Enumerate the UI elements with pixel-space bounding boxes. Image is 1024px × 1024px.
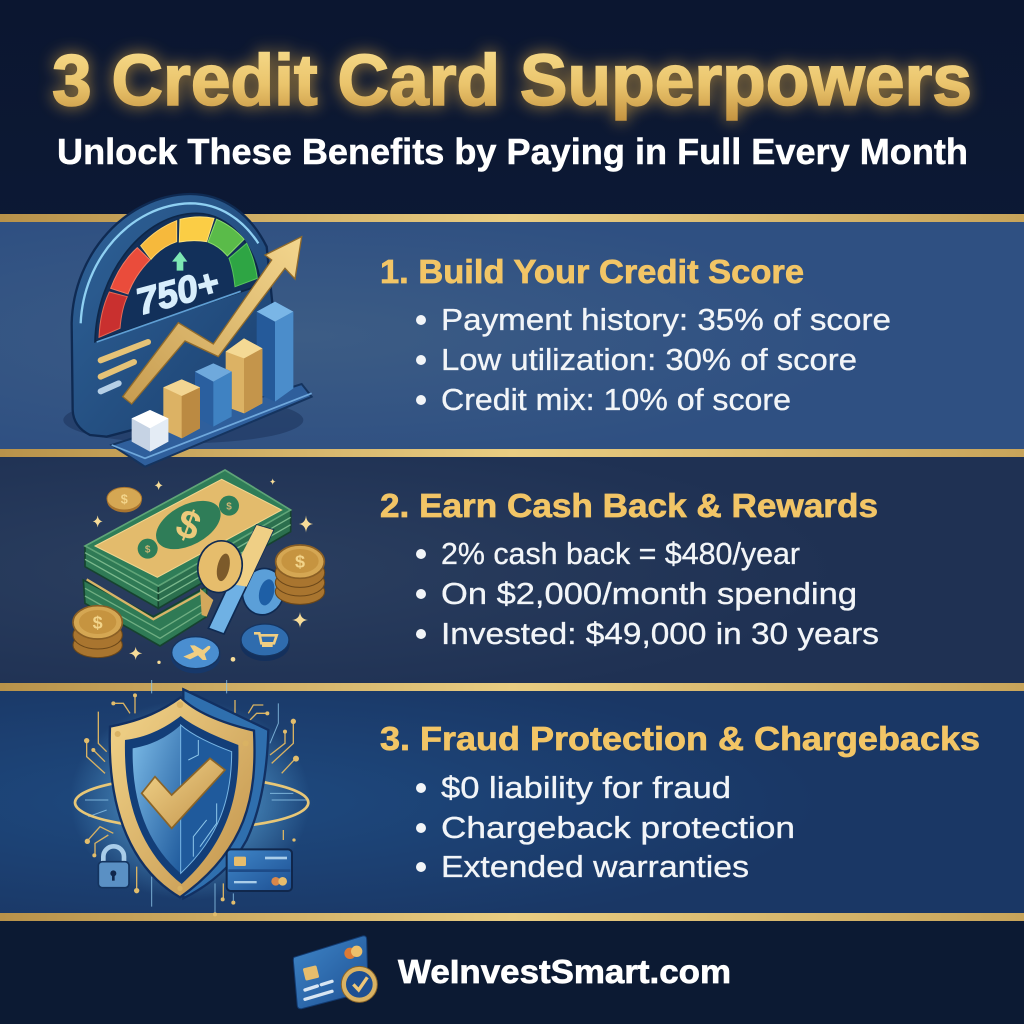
- band: cash back: [0, 454, 1024, 686]
- bullet list: fraud protection facts: [416, 770, 795, 884]
- title: 3 Credit Card Superpowers: [52, 41, 972, 121]
- icon: cash stacks, coins and percent sign: $: [170, 501, 206, 550]
- bullet list: credit score facts: Payment history: 35% of score: [441, 302, 891, 337]
- icon: cash stacks, coins and percent sign: [73, 470, 325, 673]
- icon: cash stacks, coins and percent sign: $: [121, 492, 128, 506]
- bullet list: credit score facts: Credit mix: 10% of score: [441, 382, 791, 417]
- bullet list: cash back facts: Invested: $49,000 in 30 years: [441, 616, 879, 651]
- bullet list: fraud protection facts: Extended warranties: [441, 849, 749, 884]
- icon: cash stacks, coins and percent sign: $: [295, 551, 305, 571]
- icon: cash stacks, coins and percent sign: $: [93, 613, 103, 633]
- bullet list: credit score facts: [416, 302, 891, 417]
- band: credit score: [0, 220, 1024, 452]
- bullet list: cash back facts: On $2,000/month spending: [441, 576, 857, 611]
- subtitle: Unlock These Benefits by Paying in Full Every Month: [57, 131, 968, 172]
- bullet list: cash back facts: [416, 536, 879, 651]
- heading: fraud protection: 3. Fraud Protection & Chargebacks: [380, 720, 980, 757]
- icon: shield with check mark, lock and card: [70, 680, 310, 916]
- icon: credit score gauge with rising chart: 750+: [132, 261, 223, 323]
- bullet list: fraud protection facts: $0 liability for fraud: [441, 770, 731, 805]
- heading: build credit score: 1. Build Your Credit Score: [380, 253, 804, 290]
- title: 3 Credit Card Superpowers: [52, 41, 972, 121]
- bullet list: fraud protection facts: Chargeback protection: [441, 810, 795, 845]
- band: fraud protection: [0, 688, 1024, 916]
- footer background: [0, 921, 1024, 1024]
- footer website name: WeInvestSmart.com: [398, 953, 731, 990]
- icon: credit score gauge with rising chart: [63, 194, 312, 467]
- icon: cash stacks, coins and percent sign: $: [226, 501, 232, 512]
- bullet list: credit score facts: Low utilization: 30% of score: [441, 342, 857, 377]
- icon: footer credit card badge: [293, 936, 377, 1009]
- icon: cash stacks, coins and percent sign: $: [145, 544, 151, 555]
- bullet list: cash back facts: 2% cash back = $480/year: [441, 536, 800, 571]
- heading: earn cash back: 2. Earn Cash Back & Rewards: [380, 487, 878, 524]
